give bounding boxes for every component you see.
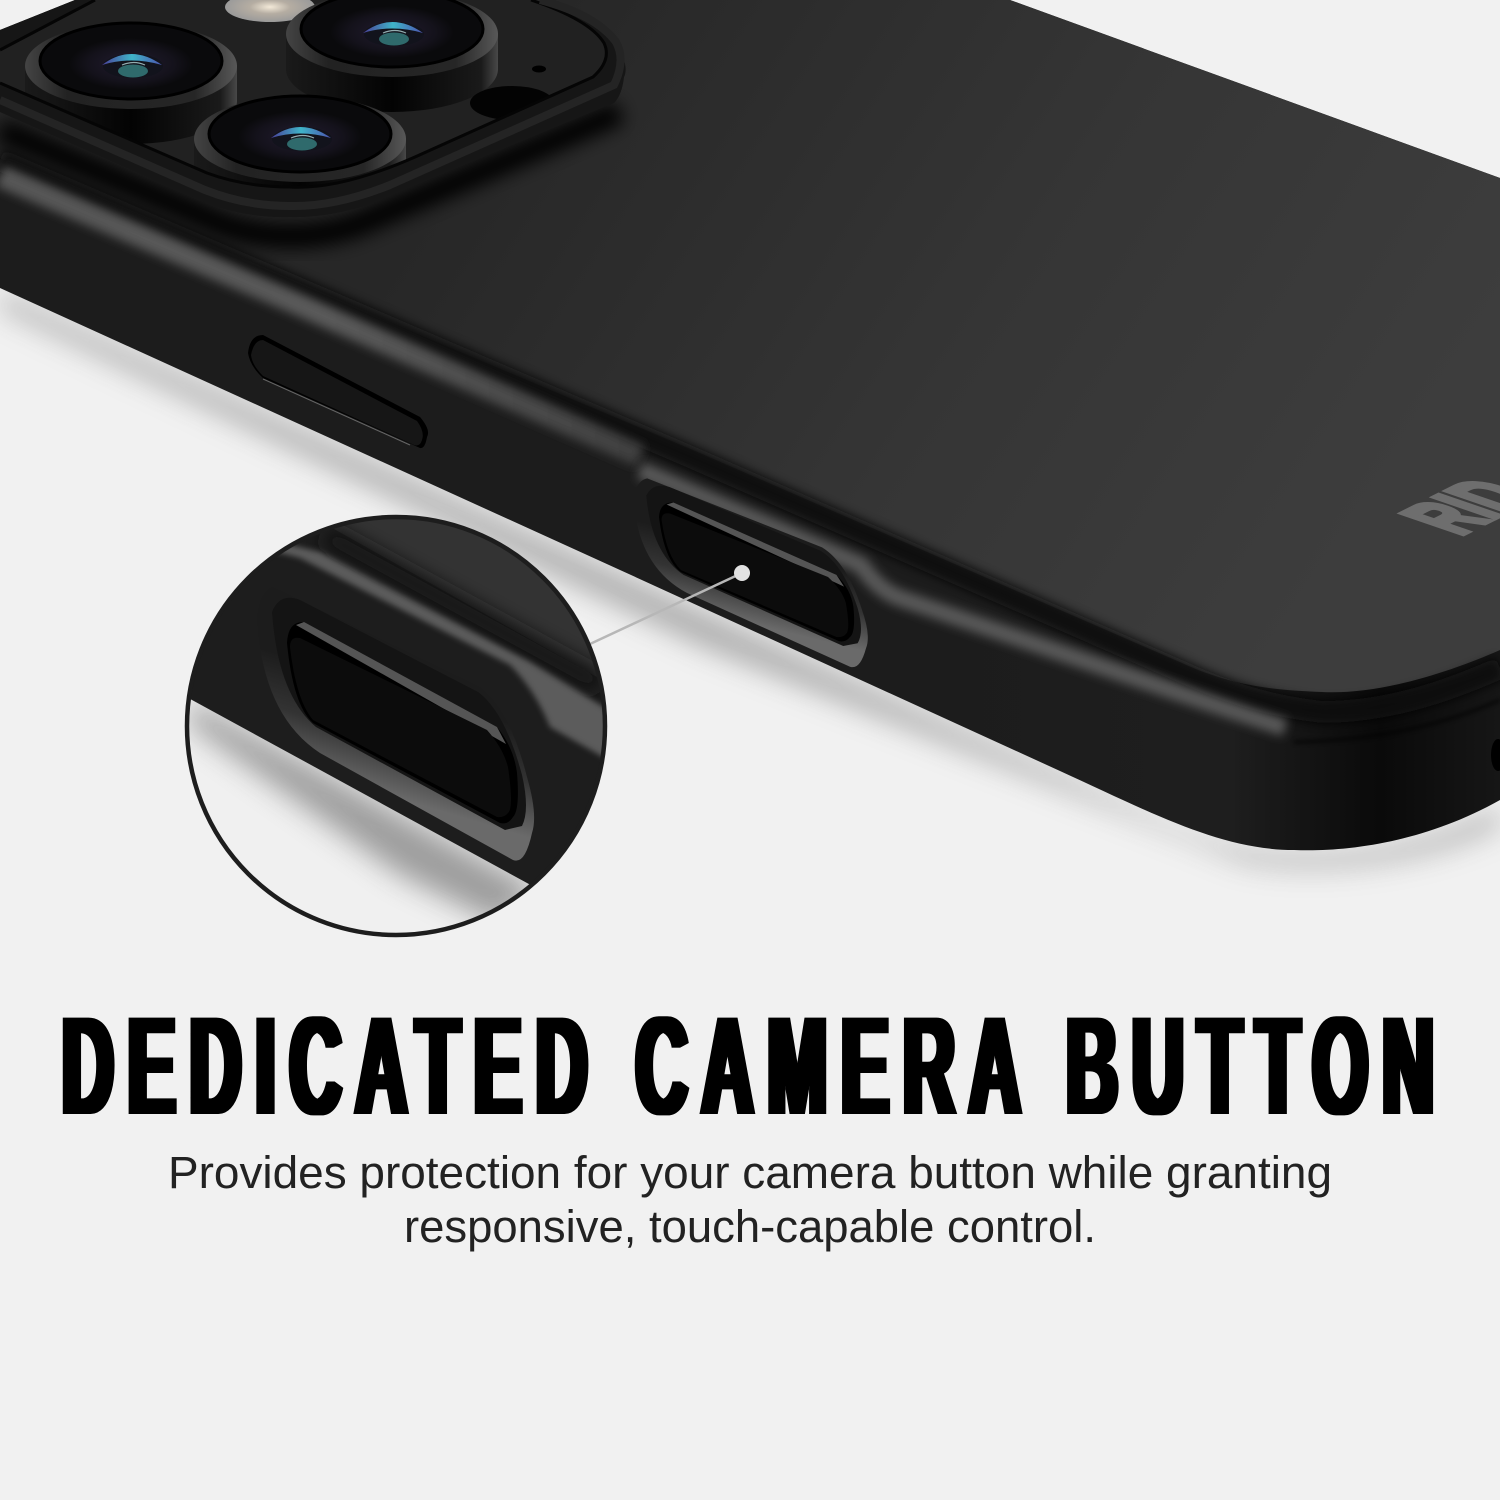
inset background xyxy=(187,517,605,935)
lens: top right xyxy=(286,0,498,112)
flash xyxy=(225,0,315,22)
plate edge shadow xyxy=(0,160,1500,712)
pointer line and dot xyxy=(590,565,750,644)
side button xyxy=(248,335,428,448)
island floor xyxy=(0,0,606,187)
inset ring xyxy=(187,517,605,935)
inset bevel highlight xyxy=(279,544,603,758)
description xyxy=(168,1147,1332,1252)
description line 1: Provides protection for your camera button while granting xyxy=(168,1147,1332,1198)
island outer frame xyxy=(0,0,626,217)
sensor hole xyxy=(470,86,554,120)
pointer dot xyxy=(734,565,750,581)
side button shadow sliver xyxy=(248,335,428,448)
lens: left xyxy=(25,23,237,144)
bevel highlight near corner xyxy=(640,470,1285,728)
camera island xyxy=(0,0,626,236)
mic dot xyxy=(532,66,546,72)
magnified inset of camera button xyxy=(184,514,608,938)
inset plate shadow xyxy=(325,535,600,685)
title: DEDICATED CAMERA BUTTON xyxy=(62,987,1434,1144)
corner shadow seam xyxy=(1294,700,1500,742)
island shadow xyxy=(0,112,620,236)
case body side xyxy=(0,0,1500,850)
side button face xyxy=(251,340,423,445)
inset cast shadow xyxy=(190,700,540,925)
pointer line xyxy=(590,573,742,644)
island rim top surface xyxy=(0,0,621,206)
camera lenses xyxy=(25,0,549,186)
side button light edge xyxy=(263,379,410,445)
island inner rim line xyxy=(0,0,606,187)
inset content xyxy=(189,519,603,924)
inset back plate xyxy=(334,519,596,676)
inset button xyxy=(257,587,534,861)
description line 2: responsive, touch-capable control. xyxy=(404,1201,1096,1252)
inset case side xyxy=(191,528,602,884)
case back plate xyxy=(0,0,1500,692)
lens: bottom xyxy=(194,94,406,186)
phone case xyxy=(0,0,1500,850)
left bevel highlight xyxy=(0,176,640,456)
camera button on phone xyxy=(634,478,868,667)
phone shadow xyxy=(0,292,1500,867)
usb port xyxy=(1491,739,1500,771)
